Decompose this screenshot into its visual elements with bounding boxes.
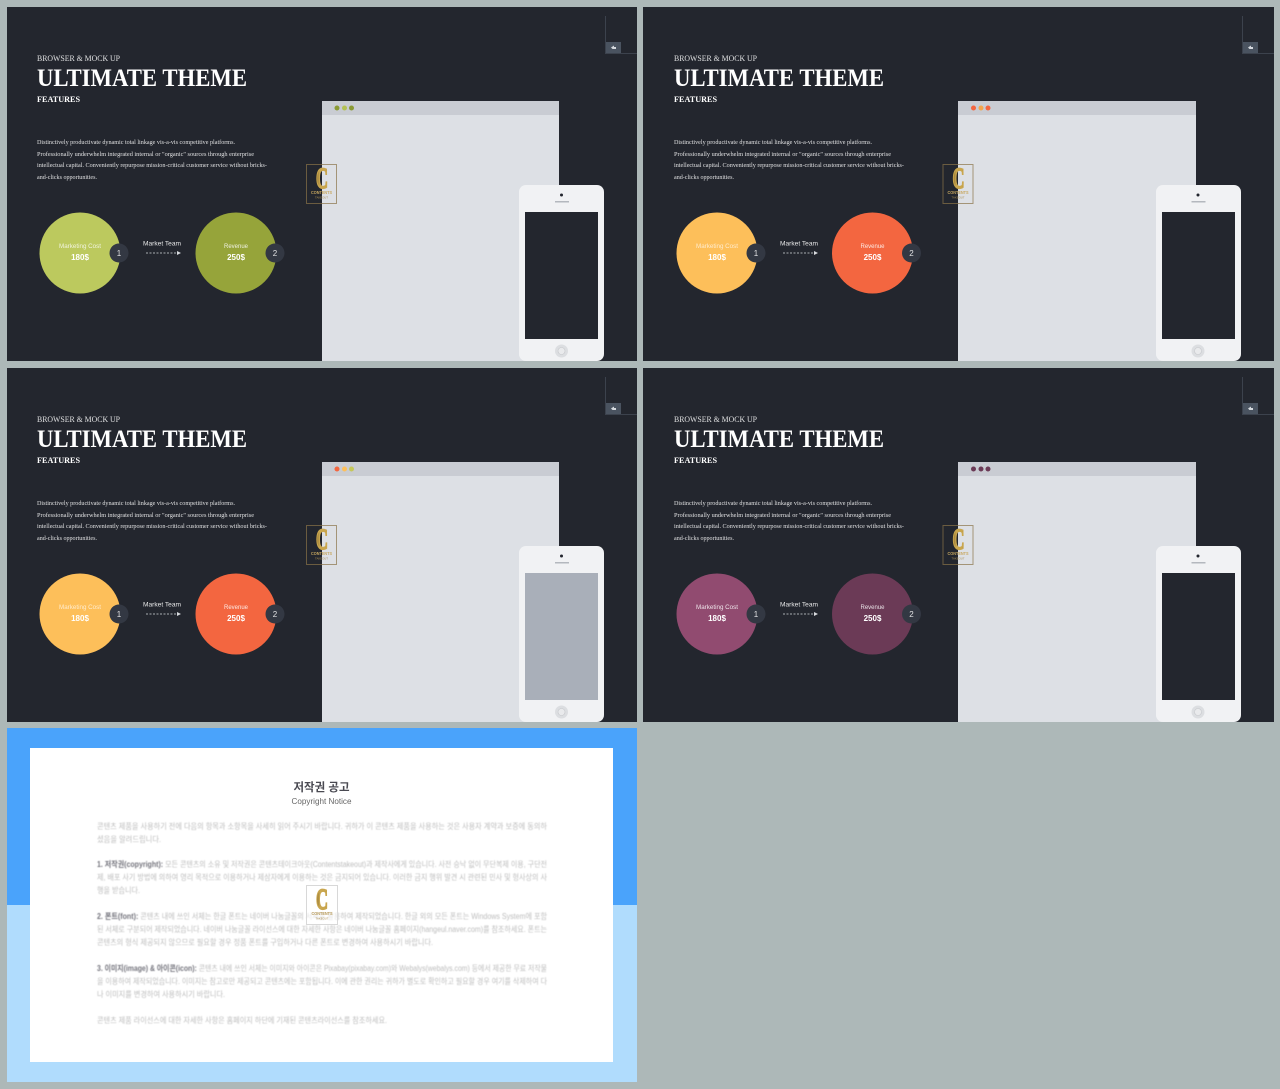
section 1: copyright: 1. 저작권(copyright): 모든 콘텐츠의 소유 및 저작권은 콘텐츠테이크아웃(Contentstakeout)과 제작사에게 있습니다. 사전 승낙 없이 무단복제 이용, 구단전 — [97, 859, 547, 869]
logo watermark: TAKEOUT — [315, 196, 328, 200]
logo watermark: TAKEOUT — [315, 916, 329, 920]
copyright title: Copyright Notice — [292, 796, 352, 806]
body text — [674, 500, 904, 542]
intro paragraph — [97, 821, 548, 844]
circle: marketing cost — [676, 574, 758, 654]
heading block: ULTIMATE THEME — [37, 65, 247, 92]
circle: marketing cost: 180$ — [71, 253, 89, 262]
section 2: font: 콘텐츠의 형식 제공되지 않으므로 필요할 경우 정품 폰트를 구입하거나 다른 폰트로 변경하여 사용하시기 바랍니다. — [97, 937, 433, 947]
corner tab icon — [606, 16, 637, 54]
phone mockup — [1156, 185, 1241, 361]
circle: revenue: 250$ — [227, 614, 245, 623]
badge 1 — [110, 244, 128, 262]
panel: copyright notice — [7, 728, 637, 1082]
circle: revenue: 250$ — [864, 253, 882, 262]
badge 2: 2 — [909, 610, 914, 619]
body text: intellectual capital. Conveniently repurpose mission-critical customer service without bricks- — [674, 523, 904, 530]
arrow: market team: Market Team — [143, 602, 181, 608]
circle: marketing cost: Marketing Cost — [696, 605, 738, 611]
body text: Professionally underwhelm integrated internal or "organic" sources through enterprise — [674, 512, 891, 519]
badge 1: 1 — [754, 249, 759, 258]
circle: marketing cost: Marketing Cost — [59, 605, 101, 611]
intro paragraph: 콘텐츠 제품을 사용하기 전에 다음의 항목과 소항목을 사세히 읽어 주시기 바랍니다. 귀하가 이 콘텐츠 제품을 사용하는 것은 사용자 계약과 보증에 동의하 — [97, 821, 548, 831]
badge 1: 1 — [754, 610, 759, 619]
copyright title: 저작권 공고 — [293, 780, 350, 794]
circle: revenue — [832, 212, 913, 294]
body text: Professionally underwhelm integrated internal or "organic" sources through enterprise — [37, 151, 254, 158]
section 3: image and icon: 3. 이미지(image) & 아이콘(icon): 콘텐츠 내에 쓰인 서체는 이미지와 아이콘은 Pixabay(pixabay.com)와 Webalys(webalys.com) 등에서 제공한 무료 저작물 — [97, 963, 547, 973]
body text: Distinctively productivate dynamic total linkage vis-a-vis competitive platforms. — [674, 500, 872, 507]
heading block: ULTIMATE THEME — [674, 426, 884, 453]
heading block: ULTIMATE THEME — [674, 65, 884, 92]
licence note: 콘텐츠 제품 라이선스에 대한 자세한 사항은 홈페이지 하단에 기재된 콘텐츠라이선스를 참조하세요. — [97, 1015, 387, 1025]
arrow: market team: Market Team — [143, 242, 181, 248]
heading block: ULTIMATE THEME — [37, 426, 247, 453]
logo watermark — [306, 162, 336, 204]
phone mockup — [1156, 546, 1241, 722]
heading block: BROWSER & MOCK UP — [674, 415, 758, 424]
body text: and-clicks opportunities. — [37, 535, 97, 542]
badge 1: 1 — [117, 249, 122, 258]
circle: revenue: 250$ — [864, 614, 882, 623]
arrow: market team — [780, 242, 818, 255]
heading block: FEATURES — [37, 94, 80, 104]
circle: marketing cost: Marketing Cost — [696, 244, 738, 250]
corner tab icon — [606, 377, 637, 414]
heading block: FEATURES — [674, 94, 717, 104]
body text: and-clicks opportunities. — [674, 174, 734, 181]
body text: Distinctively productivate dynamic total linkage vis-a-vis competitive platforms. — [674, 139, 872, 146]
circle: marketing cost: 180$ — [71, 614, 89, 623]
body text: Professionally underwhelm integrated internal or "organic" sources through enterprise — [37, 512, 254, 519]
badge 2: 2 — [273, 610, 278, 619]
body text — [674, 139, 904, 181]
circle: revenue: 250$ — [227, 253, 245, 262]
heading block: FEATURES — [37, 455, 80, 465]
browser mockup — [958, 101, 1196, 361]
section 3: image and icon: 을 이용하여 제작되었습니다. 이미지는 참고로만 제공되고 콘텐츠에는 포함됩니다. 이에 관한 권리는 귀하가 별도로 확인하고 필요할 경우 여기를 삭제하여 다 — [97, 976, 548, 986]
heading block: FEATURES — [674, 455, 717, 465]
section 2: font: 2. 폰트(font): 콘텐츠 내에 쓰인 서체는 한글 폰트는 네이버 나눔글꼴의 서체를 활용하여 제작되었습니다. 한글 외의 모든 폰트는 Windows System에 포함 — [97, 911, 548, 921]
logo watermark — [306, 883, 338, 924]
panel: green theme slide — [7, 7, 637, 361]
logo watermark: TAKEOUT — [951, 196, 965, 200]
badge 1: 1 — [117, 610, 122, 619]
copyright title — [292, 780, 352, 806]
section 1: copyright — [97, 859, 548, 895]
logo watermark: CONTENTS — [948, 551, 968, 556]
logo watermark — [943, 162, 973, 204]
circle: revenue: Revenue — [224, 605, 249, 611]
body text: Distinctively productivate dynamic total linkage vis-a-vis competitive platforms. — [37, 500, 235, 507]
logo watermark: C — [316, 883, 328, 916]
section 3: image and icon — [97, 963, 548, 999]
arrow: market team — [780, 602, 818, 616]
section 3: image and icon: 나 이미지를 변경하여 사용하시기 바랍니다. — [97, 989, 225, 999]
heading block — [674, 54, 884, 104]
logo watermark: TAKEOUT — [315, 556, 328, 560]
corner tab icon — [1242, 16, 1274, 54]
badge 1 — [110, 604, 128, 624]
arrow: market team — [143, 602, 181, 616]
panel: orange theme slide with grey screen — [7, 368, 637, 722]
logo watermark: CONTENTS — [948, 190, 968, 195]
badge 2: 2 — [273, 249, 278, 258]
section 2: font — [97, 911, 548, 947]
body text: intellectual capital. Conveniently repurpose mission-critical customer service without bricks- — [37, 523, 267, 530]
logo watermark — [943, 523, 973, 564]
logo watermark: CONTENTS — [311, 551, 332, 556]
corner tab icon — [1242, 377, 1274, 414]
heading block: BROWSER & MOCK UP — [674, 54, 758, 63]
phone mockup — [519, 185, 604, 361]
badge 2 — [902, 244, 921, 262]
badge 2 — [266, 604, 284, 624]
intro paragraph: 셨음을 알려드립니다. — [97, 834, 161, 844]
browser mockup — [322, 101, 559, 361]
heading block: BROWSER & MOCK UP — [37, 54, 121, 63]
browser mockup — [958, 462, 1196, 722]
circle: marketing cost: 180$ — [708, 614, 726, 623]
circle: revenue — [832, 574, 913, 654]
body text: and-clicks opportunities. — [37, 174, 97, 181]
circle: revenue: Revenue — [860, 605, 885, 611]
circle: marketing cost — [40, 212, 120, 294]
circle: marketing cost: 180$ — [708, 253, 726, 262]
circle: revenue: Revenue — [224, 244, 249, 250]
heading block: BROWSER & MOCK UP — [37, 415, 121, 424]
logo watermark — [306, 523, 336, 564]
circle: revenue: Revenue — [860, 244, 885, 250]
logo watermark: CONTENTS — [311, 190, 332, 195]
section 1: copyright: 행을 받습니다. — [97, 885, 140, 895]
logo watermark: C — [952, 523, 964, 556]
circle: revenue — [196, 212, 276, 294]
arrow: market team — [143, 242, 181, 255]
logo watermark: CONTENTS — [312, 911, 332, 916]
arrow: market team: Market Team — [780, 602, 818, 608]
logo watermark: C — [952, 162, 964, 195]
badge 1 — [746, 244, 766, 262]
body text: Professionally underwhelm integrated internal or "organic" sources through enterprise — [674, 151, 891, 158]
heading block — [674, 415, 884, 465]
section 2: font: 된 서체로 구분되어 제작되었습니다. 네이버 나눔글꼴 라이선스에 대한 자세한 사항은 네이버 나눔글꼴 홈페이지(hangeul.naver.com)를 참조하세요. 폰트는 — [97, 924, 547, 934]
circle: marketing cost: Marketing Cost — [59, 244, 101, 250]
body text — [37, 500, 267, 542]
body text: Distinctively productivate dynamic total linkage vis-a-vis competitive platforms. — [37, 139, 235, 146]
panel: plum theme slide — [643, 368, 1274, 722]
body text: and-clicks opportunities. — [674, 535, 734, 542]
body text: intellectual capital. Conveniently repurpose mission-critical customer service without bricks- — [674, 162, 904, 169]
logo watermark: C — [316, 523, 328, 556]
phone mockup — [519, 546, 604, 722]
browser mockup — [322, 462, 559, 722]
badge 2 — [266, 244, 284, 262]
circle: revenue — [196, 574, 276, 654]
badge 2 — [902, 604, 921, 624]
panel: orange theme slide — [643, 7, 1274, 361]
logo watermark: C — [316, 162, 328, 195]
circle: marketing cost — [676, 212, 758, 294]
heading block — [37, 415, 247, 465]
body text — [37, 139, 267, 181]
logo watermark: TAKEOUT — [951, 556, 965, 560]
badge 2: 2 — [909, 249, 914, 258]
circle: marketing cost — [40, 574, 120, 654]
heading block — [37, 54, 247, 104]
arrow: market team: Market Team — [780, 242, 818, 248]
section 1: copyright: 제, 배포 사기 방법에 의하여 영리 목적으로 이용하거나 제삼자에게 이용하는 것은 금지되어 있습니다. 이러한 금지 행위 발견 시 관련된 민사 및 형사상의 사 — [97, 872, 548, 882]
body text: intellectual capital. Conveniently repurpose mission-critical customer service without bricks- — [37, 162, 267, 169]
badge 1 — [746, 604, 766, 624]
